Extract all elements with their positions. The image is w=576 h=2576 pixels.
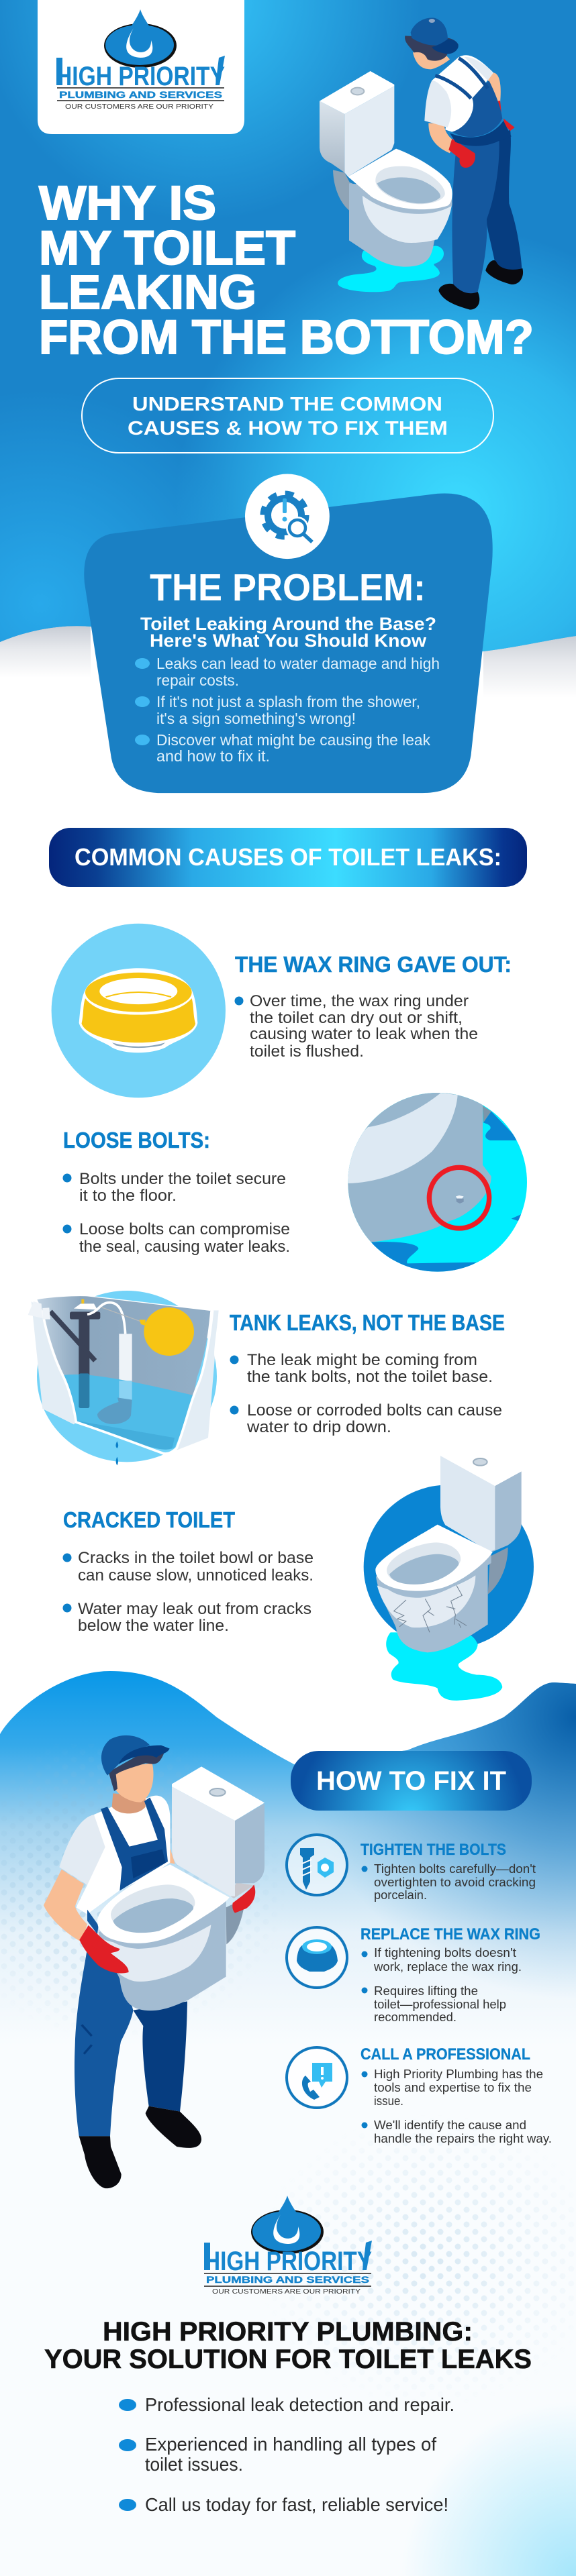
bullet list: problem: Leaks can lead to water damage and high [156, 655, 440, 672]
fix step: tighten the bolts: overtighten to avoid cracking [374, 1876, 536, 1889]
cause: loose bolts: Loose bolts can compromise [79, 1220, 290, 1238]
fix step: replace the wax ring: REPLACE THE WAX RING [361, 1925, 540, 1943]
cause: loose bolts: the seal, causing water leaks. [79, 1238, 290, 1256]
toilet [320, 71, 452, 267]
icon: blue wax ring [287, 1927, 347, 1988]
title: MY TOILET [39, 222, 295, 275]
cause: tank leaks: water to drip down. [246, 1418, 391, 1436]
cause: wax ring: the toilet can dry out or shift, [250, 1009, 463, 1027]
title [39, 177, 534, 364]
logo wordmark [56, 56, 225, 111]
fix step: tighten the bolts: TIGHTEN THE BOLTS [361, 1841, 506, 1859]
fix step: replace the wax ring: recommended. [374, 2010, 457, 2024]
bullet list: problem: repair costs. [156, 672, 239, 689]
bullet list: problem: If it's not just a splash from the shower, [156, 693, 420, 710]
fix step: replace the wax ring [287, 1925, 540, 2024]
bullet list: services: toilet issues. [145, 2454, 243, 2475]
background: lower blue section [0, 1671, 576, 2034]
background: top blue gradient with wave edge [0, 0, 576, 698]
fix step: tighten the bolts: porcelain. [374, 1888, 427, 1902]
icon: tank cross-section [28, 1291, 219, 1465]
heading pill: how to fix it [291, 1751, 532, 1811]
bullet list: services [119, 2394, 454, 2515]
logo: bottom [204, 2196, 372, 2296]
cause: wax ring [235, 952, 512, 1061]
cause: loose bolts: LOOSE BOLTS: [63, 1128, 210, 1152]
title: LEAKING [39, 266, 256, 319]
fix step: tighten the bolts: Tighten bolts carefully—don't [374, 1862, 536, 1876]
icon: wax ring [52, 924, 226, 1097]
cause: loose bolts: it to the floor. [79, 1187, 177, 1205]
cause: cracked toilet: Cracks in the toilet bowl or base [78, 1549, 314, 1567]
fix step: call a professional: handle the repairs the right way. [374, 2132, 552, 2145]
cause: tank leaks: the tank bolts, not the toilet base. [247, 1368, 493, 1386]
subtitle pill: UNDERSTAND THE COMMON [132, 394, 442, 415]
fix step: call a professional: High Priority Plumbing has the [374, 2068, 543, 2081]
banner: common causes: COMMON CAUSES OF TOILET LEAKS: [75, 843, 501, 871]
fix step: call a professional [287, 2045, 552, 2145]
cause: tank leaks [230, 1310, 505, 1436]
fix step: call a professional: issue. [374, 2094, 403, 2108]
background: halftone dots [0, 1744, 576, 2435]
cause: wax ring: causing water to leak when the [250, 1025, 478, 1043]
heading: your solution [44, 2317, 532, 2374]
icon: phone and alert [287, 2047, 347, 2108]
fix step: replace the wax ring: work, replace the wax ring. [373, 1960, 522, 1974]
logo wordmark: OUR CUSTOMERS ARE OUR PRIORITY [65, 103, 213, 111]
cause: tank leaks: TANK LEAKS, NOT THE BASE [230, 1310, 505, 1335]
heading: your solution: HIGH PRIORITY PLUMBING: [103, 2317, 473, 2347]
logo: bottom: PLUMBING AND SERVICES [206, 2274, 369, 2285]
icon: gear with magnifier and exclamation [262, 493, 312, 542]
logo wordmark: PLUMBING AND SERVICES [59, 89, 222, 100]
heading: your solution: YOUR SOLUTION FOR TOILET LEAKS [44, 2345, 532, 2374]
arms and shirt [44, 1793, 175, 1942]
logo: bottom: HIGH PRIORITY [204, 2247, 372, 2276]
subheading [140, 614, 436, 651]
bullet list: problem: and how to fix it. [156, 747, 270, 765]
cause: wax ring: THE WAX RING GAVE OUT: [235, 952, 512, 977]
fix step: replace the wax ring: If tightening bolts doesn't [374, 1946, 516, 1960]
carried toilet [79, 1766, 265, 2010]
subheading: Toilet Leaking Around the Base? [140, 614, 436, 634]
illustration: plumber carrying toilet [44, 1735, 265, 2188]
cause: loose bolts [63, 1128, 290, 1256]
legs and boots [75, 1947, 201, 2188]
fix step: call a professional: tools and expertise to fix the [374, 2081, 532, 2094]
bullet list: problem: Discover what might be causing the leak [156, 731, 430, 749]
bullet list: services: Professional leak detection and repair. [145, 2394, 454, 2415]
plumber [405, 17, 523, 310]
subtitle pill: CAUSES & HOW TO FIX THEM [128, 418, 448, 439]
title: FROM THE BOTTOM? [39, 311, 534, 364]
heading pill: how to fix it: HOW TO FIX IT [316, 1766, 506, 1796]
fix step: call a professional: We'll identify the cause and [374, 2118, 526, 2132]
banner: common causes [49, 828, 527, 887]
cause: cracked toilet: can cause slow, unnoticed leaks. [78, 1566, 314, 1585]
heading: the problem: THE PROBLEM: [150, 566, 426, 609]
panel: logo card [38, 0, 244, 134]
bullet list: problem [135, 655, 440, 765]
cause: wax ring: Over time, the wax ring under [250, 992, 469, 1010]
icon: bolt closeup with red circle [348, 1093, 527, 1272]
cause: wax ring: toilet is flushed. [250, 1042, 364, 1061]
puddle [338, 246, 444, 292]
logo: water drop [104, 9, 177, 68]
bullet list: services: Call us today for fast, reliable service! [145, 2494, 448, 2515]
illustration: plumber inspecting leaking toilet [320, 17, 523, 310]
head and cap [101, 1735, 170, 1803]
fix step: replace the wax ring: toilet—professional help [374, 1998, 506, 2011]
cause: tank leaks: Loose or corroded bolts can cause [247, 1401, 502, 1419]
cause: cracked toilet: Water may leak out from cracks [78, 1600, 311, 1618]
icon: cracked toilet [364, 1444, 534, 1701]
fix step: replace the wax ring: Requires lifting the [374, 1984, 478, 1998]
background: bottom-right glow [396, 2395, 576, 2576]
bullet list: problem: it's a sign something's wrong! [156, 710, 356, 727]
logo wordmark: HIGH PRIORITY [56, 62, 225, 91]
cause: loose bolts: Bolts under the toilet secure [79, 1170, 286, 1188]
icon: bolt and nut [287, 1835, 347, 1895]
subtitle pill [82, 378, 493, 453]
fix step: call a professional: CALL A PROFESSIONAL [361, 2045, 530, 2063]
panel: the problem [84, 474, 493, 793]
cause: cracked toilet: below the water line. [78, 1617, 229, 1635]
logo: bottom: OUR CUSTOMERS ARE OUR PRIORITY [212, 2288, 361, 2296]
cause: tank leaks: The leak might be coming from [247, 1351, 477, 1369]
cause: cracked toilet: CRACKED TOILET [63, 1507, 235, 1532]
subheading: Here's What You Should Know [150, 631, 427, 651]
title: WHY IS [39, 177, 216, 230]
fix step: tighten the bolts [287, 1835, 536, 1902]
cause: cracked toilet [63, 1507, 314, 1635]
bullet list: services: Experienced in handling all types of [145, 2434, 436, 2455]
